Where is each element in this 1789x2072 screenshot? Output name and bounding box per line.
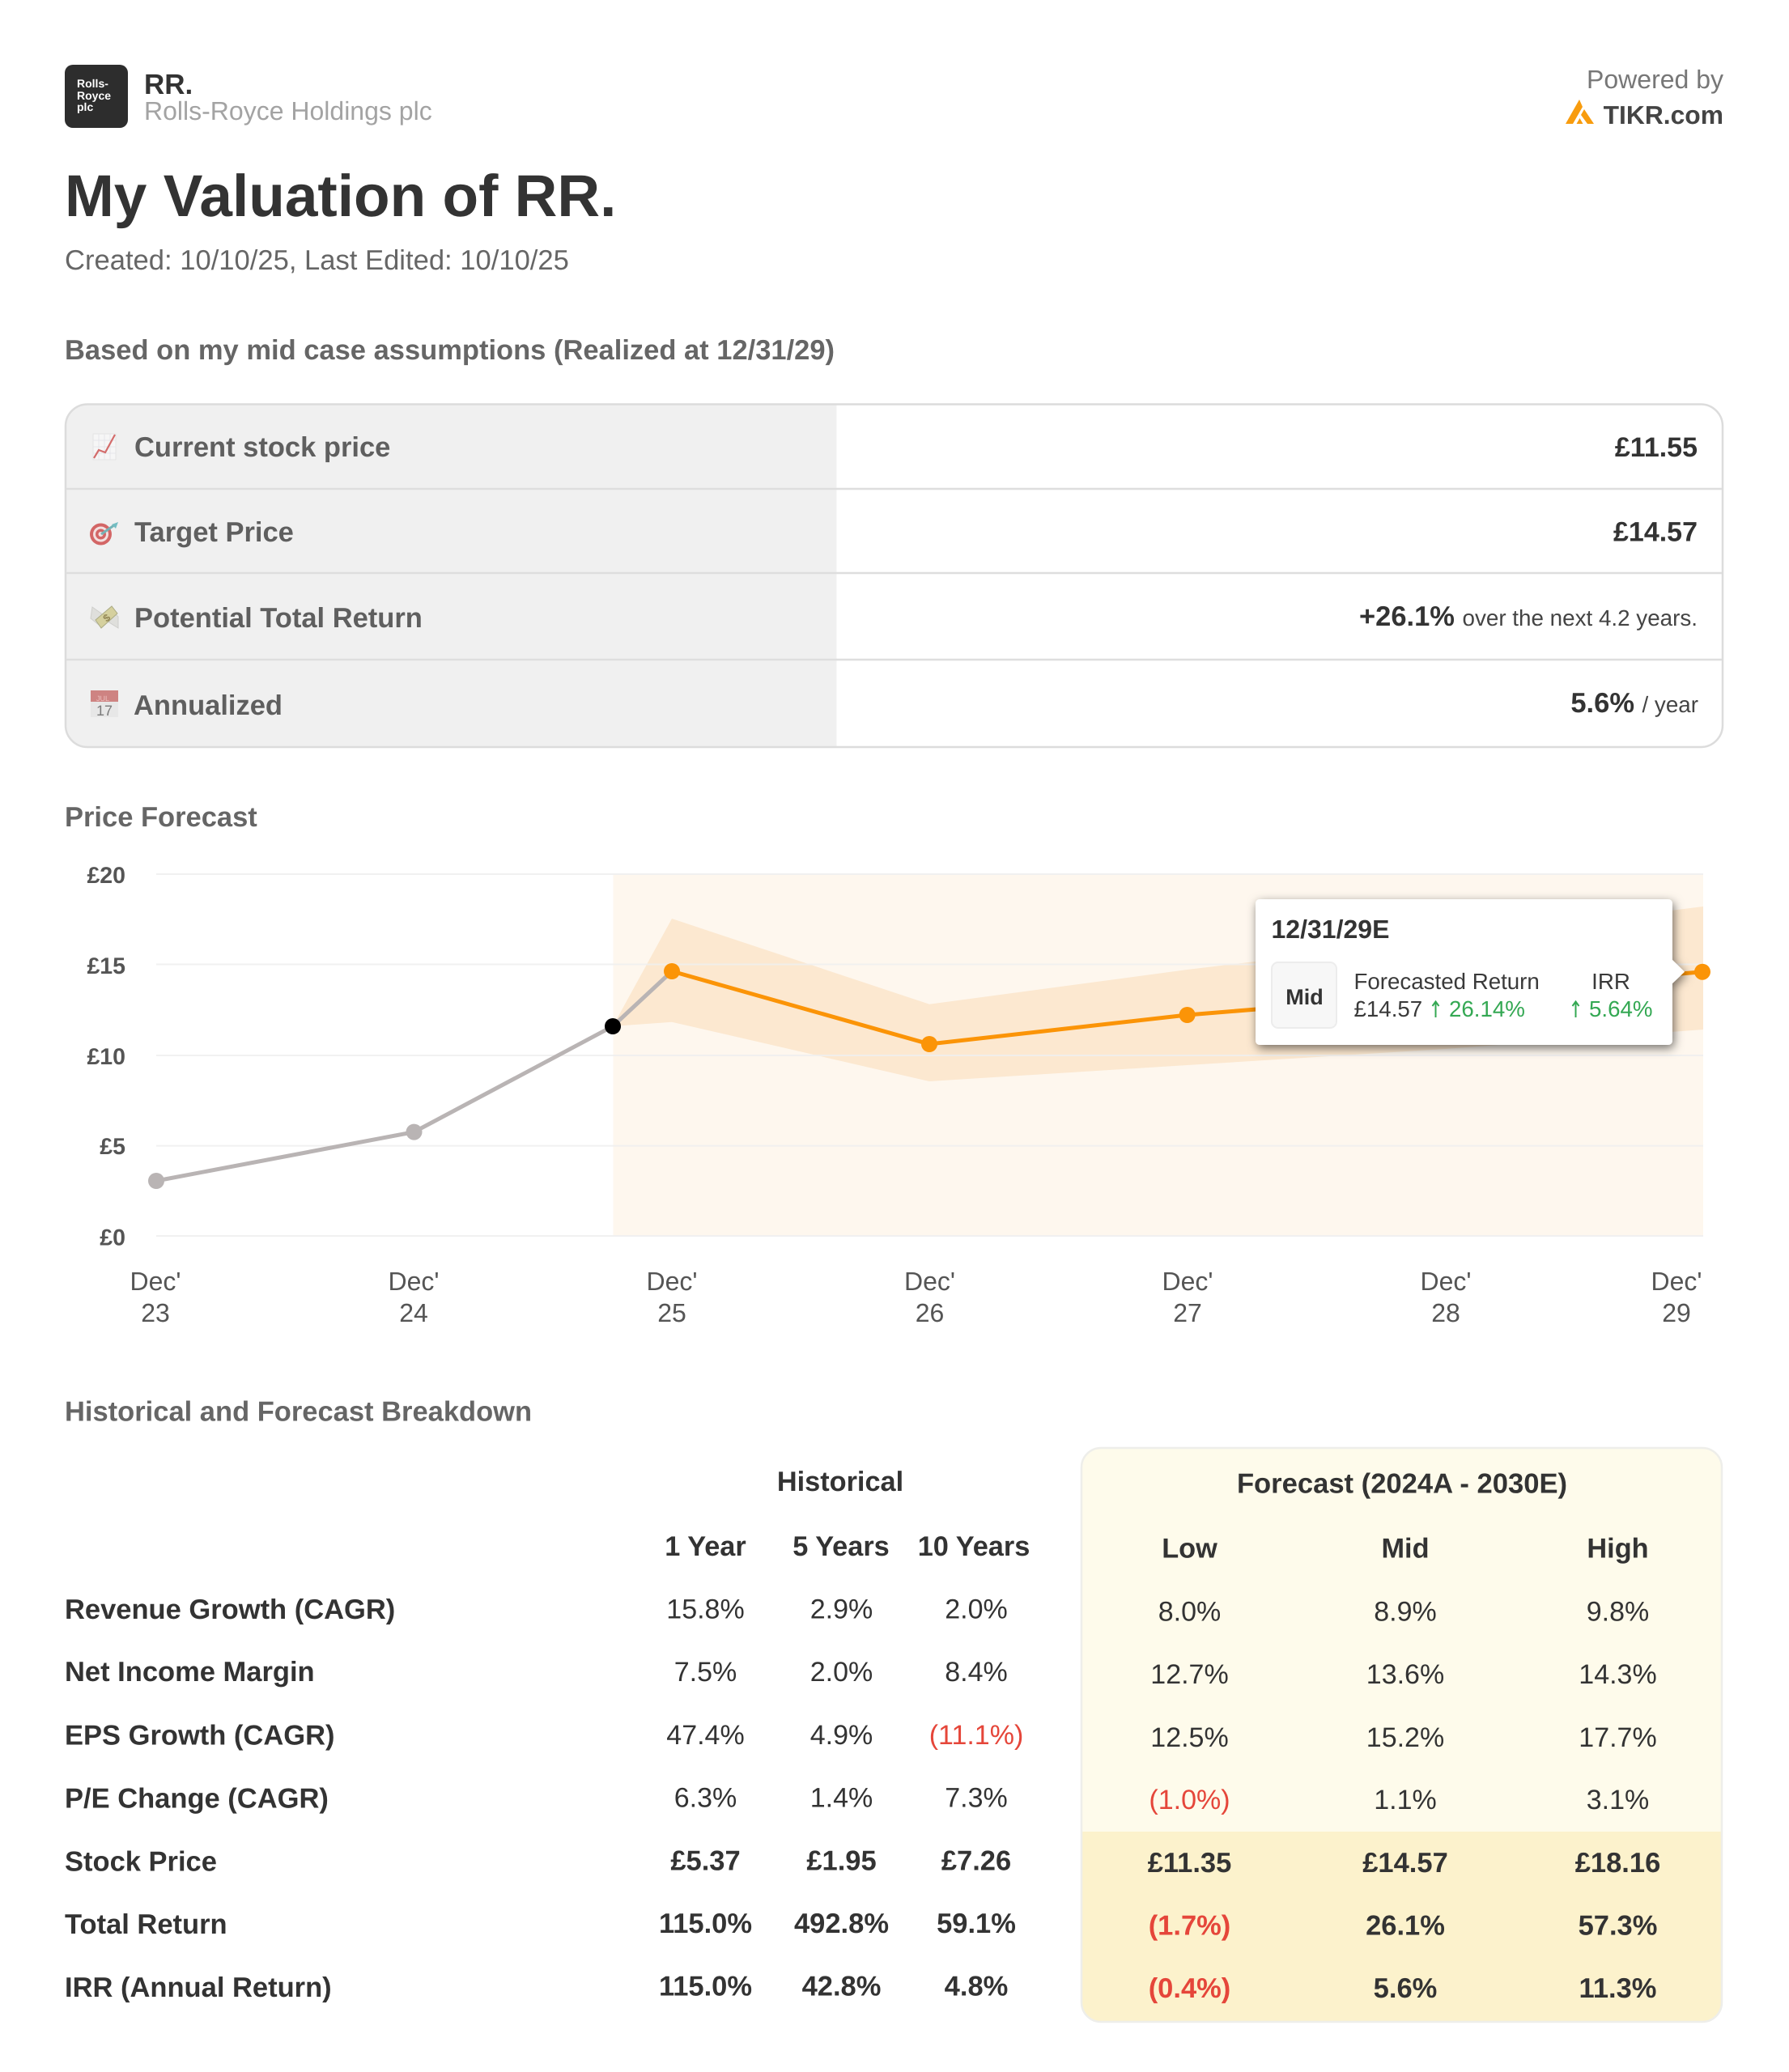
row labels: Stock Price — [65, 1847, 217, 1878]
table: forecast figures: 11.3% — [1579, 1973, 1656, 2004]
icon: chart — [93, 434, 116, 460]
y axis labels: £0 — [100, 1225, 125, 1251]
tooltip: mid badge — [1272, 962, 1336, 1028]
tooltip callout — [1256, 899, 1685, 1045]
table: forecast figures: 9.8% — [1587, 1596, 1649, 1627]
table: forecast figures: 57.3% — [1579, 1910, 1657, 1941]
mid case forecast line — [664, 963, 1710, 1052]
tooltip callout: 26.14% — [1449, 996, 1525, 1021]
table: historical figures: 115.0% — [659, 1909, 752, 1939]
table: forecast figures: £14.57 — [1362, 1848, 1448, 1879]
row labels: EPS Growth (CAGR) — [65, 1721, 335, 1751]
table: forecast figures: 12.5% — [1150, 1722, 1229, 1753]
row: annualized: 5.6% — [1570, 688, 1634, 719]
row labels: Revenue Growth (CAGR) — [65, 1594, 395, 1625]
table: forecast figures: 15.2% — [1366, 1722, 1444, 1753]
table: historical figures: 47.4% — [666, 1720, 745, 1751]
table: historical figures: 42.8% — [802, 1972, 881, 2002]
table: forecast figures: 17.7% — [1579, 1722, 1657, 1753]
icon: calendar — [91, 690, 118, 719]
table: historical figures: 15.8% — [666, 1594, 745, 1625]
header: ticker and company name — [144, 69, 432, 125]
table: historical figures: 115.0% — [659, 1972, 752, 2002]
row: annualized — [91, 688, 1698, 721]
row: potential total return: over the next 4.2 years. — [1463, 605, 1698, 631]
table: historical figures: 10 Years — [918, 1531, 1030, 1562]
table: historical figures: 5 Years — [793, 1531, 890, 1562]
x axis labels: 28 — [1431, 1298, 1460, 1327]
tooltip callout: IRR — [1591, 969, 1630, 994]
table: forecast figures: High — [1587, 1533, 1649, 1564]
table: historical figures: 7.3% — [945, 1782, 1008, 1813]
row: potential total return: Potential Total Return — [134, 603, 423, 634]
table: forecast figures: 26.1% — [1366, 1910, 1445, 1941]
y axis labels — [87, 863, 125, 1251]
row labels: Total Return — [65, 1909, 227, 1940]
table: historical figures: £7.26 — [941, 1845, 1011, 1876]
table: historical figures: 1 Year — [665, 1531, 746, 1562]
title: My Valuation of RR. — [65, 163, 616, 229]
x axis labels: Dec' — [388, 1267, 440, 1296]
row: annualized: Annualized — [134, 690, 283, 721]
table: historical figures: 1.4% — [810, 1782, 873, 1813]
table: forecast figures: 3.1% — [1587, 1785, 1649, 1815]
header: company logo — [65, 65, 128, 128]
row labels: IRR (Annual Return) — [65, 1972, 332, 2003]
row: target price — [90, 516, 1698, 548]
x axis labels: 27 — [1173, 1298, 1202, 1327]
row: current stock price — [93, 432, 1698, 463]
x axis labels — [130, 1267, 1702, 1327]
table: historical figures: Historical — [777, 1467, 903, 1497]
table: forecast figures: 14.3% — [1579, 1659, 1657, 1690]
header: company logo: plc — [77, 100, 93, 113]
table: historical figures: £5.37 — [670, 1845, 741, 1876]
icon: up arrow — [1433, 1002, 1439, 1017]
x axis labels: 23 — [141, 1298, 170, 1327]
table: forecast figures: (1.0%) — [1149, 1785, 1230, 1815]
table: forecast figures: 12.7% — [1150, 1659, 1229, 1690]
x axis labels: Dec' — [1162, 1267, 1213, 1296]
header: company logo: Rolls- — [77, 77, 108, 90]
y axis labels: £20 — [87, 863, 125, 889]
table: forecast figures: £18.16 — [1575, 1848, 1660, 1879]
table: forecast figures: 5.6% — [1374, 1973, 1437, 2004]
table: forecast figures: £11.35 — [1148, 1848, 1231, 1879]
icon: money with wings — [91, 606, 118, 628]
header: ticker and company name: Rolls-Royce Holdings plc — [144, 96, 432, 125]
icon: target — [90, 522, 118, 546]
header: powered by TIKR — [1566, 65, 1723, 130]
table: historical figures: 4.8% — [945, 1972, 1008, 2002]
y axis labels: £15 — [87, 953, 125, 979]
chart: price forecast line chart — [87, 863, 1710, 1327]
header: company logo: Royce — [77, 89, 111, 102]
table: historical figures: 4.9% — [810, 1720, 873, 1751]
tooltip callout: Forecasted Return — [1353, 969, 1540, 994]
y axis labels: £5 — [100, 1134, 125, 1160]
row labels: Net Income Margin — [65, 1657, 315, 1688]
tooltip callout: 5.64% — [1589, 996, 1653, 1021]
table: forecast figures: Forecast (2024A - 2030E) — [1237, 1468, 1567, 1499]
table: forecast figures: 8.0% — [1158, 1596, 1221, 1627]
icon: money with wings: $ — [100, 611, 113, 624]
row labels: P/E Change (CAGR) — [65, 1784, 329, 1815]
header: powered by TIKR: TIKR.com — [1604, 100, 1723, 130]
x axis labels: Dec' — [1651, 1267, 1702, 1296]
row: potential total return — [91, 601, 1698, 634]
x axis labels: 29 — [1662, 1298, 1691, 1327]
table: historical figures: 492.8% — [794, 1909, 889, 1939]
table: historical figures — [659, 1467, 1030, 2002]
row labels — [65, 1594, 395, 2003]
row: annualized: / year — [1642, 692, 1698, 717]
row: target price: Target Price — [134, 517, 294, 548]
x axis labels: Dec' — [130, 1267, 181, 1296]
table: forecast figures — [1148, 1468, 1660, 2004]
table: historical figures: 2.0% — [810, 1657, 873, 1688]
table: historical figures: 6.3% — [674, 1782, 737, 1813]
heading: price forecast: Price Forecast — [65, 802, 257, 833]
row: current stock price: £11.55 — [1615, 432, 1698, 463]
heading: historical and forecast breakdown: Historical and Forecast Breakdown — [65, 1397, 532, 1428]
table: forecast figures: 13.6% — [1366, 1659, 1444, 1690]
historical price line — [148, 971, 672, 1189]
heading: mid case assumptions: Based on my mid case assumptions (Realized at 12/31/29) — [65, 335, 835, 366]
table: historical figures: 7.5% — [674, 1657, 737, 1688]
row: potential total return: +26.1% — [1359, 601, 1455, 632]
tooltip callout: £14.57 — [1353, 996, 1422, 1021]
x axis labels: Dec' — [1420, 1267, 1472, 1296]
table: forecast figures: (0.4%) — [1149, 1973, 1230, 2004]
x axis labels: Dec' — [646, 1267, 698, 1296]
icon: up arrow — [1572, 1002, 1579, 1017]
x axis labels: Dec' — [904, 1267, 955, 1296]
icon: calendar: 17 — [96, 703, 113, 719]
table: historical figures: 59.1% — [937, 1909, 1016, 1939]
header: powered by TIKR: Powered by — [1587, 65, 1723, 94]
table: historical figures: 2.9% — [810, 1594, 873, 1625]
table: forecast figures: Mid — [1381, 1533, 1430, 1564]
table: historical figures: 2.0% — [945, 1594, 1008, 1625]
table: historical figures: £1.95 — [806, 1845, 877, 1876]
x axis labels: 25 — [657, 1298, 686, 1327]
panel: forecast background — [1081, 1448, 1722, 2023]
table: historical figures: (11.1%) — [929, 1720, 1023, 1751]
header: ticker and company name: RR. — [144, 69, 193, 100]
table: forecast figures: 8.9% — [1374, 1596, 1437, 1627]
x axis labels: 26 — [916, 1298, 944, 1327]
x axis labels: 24 — [399, 1298, 428, 1327]
row: target price: £14.57 — [1613, 516, 1698, 547]
gridlines — [156, 874, 1703, 1236]
table: forecast figures: 1.1% — [1374, 1785, 1437, 1815]
icon: calendar: JUL — [96, 694, 109, 703]
y axis labels: £10 — [87, 1044, 125, 1070]
panel: valuation summary table — [66, 404, 1723, 748]
tooltip callout: 12/31/29E — [1271, 915, 1389, 944]
forecast range band — [613, 906, 1703, 1081]
forecast period background — [614, 874, 1703, 1236]
current price marker — [605, 1018, 621, 1034]
tooltip: mid badge: Mid — [1285, 985, 1324, 1009]
table: forecast figures: Low — [1162, 1533, 1217, 1564]
table: historical figures: 8.4% — [945, 1657, 1008, 1688]
created and edited dates: Created: 10/10/25, Last Edited: 10/10/25 — [65, 245, 569, 276]
row: current stock price: Current stock price — [134, 432, 390, 463]
table: forecast figures: (1.7%) — [1149, 1910, 1230, 1941]
